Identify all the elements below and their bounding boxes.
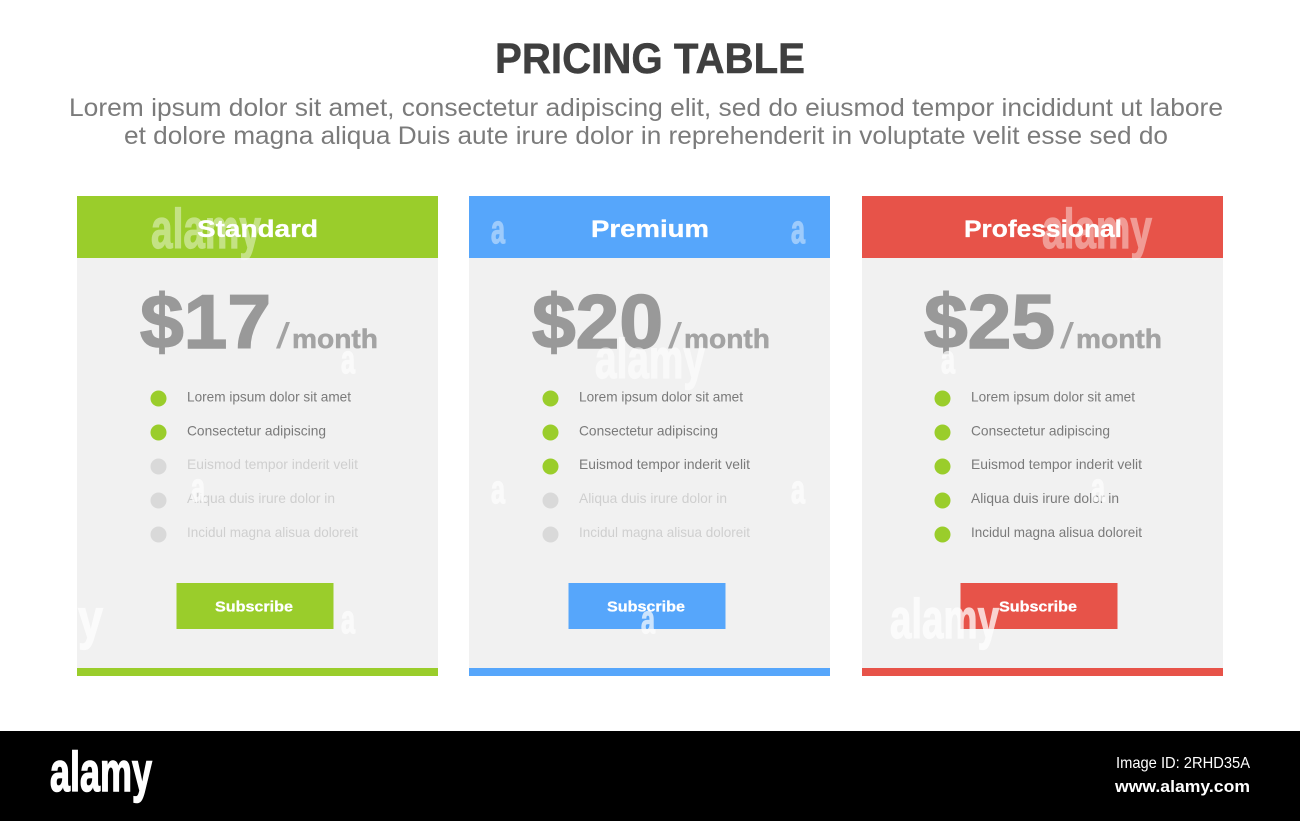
website: www.alamy.com — [1114, 777, 1250, 796]
feature list: Lorem ipsum dolor sit amet — [187, 388, 351, 404]
watermark on header: alamy — [151, 197, 261, 260]
watermarks across the panels: alamy — [595, 327, 705, 390]
watermarks across the panels: a — [641, 598, 655, 642]
subtitle text — [69, 94, 1223, 150]
per month label: / — [668, 315, 682, 356]
watermarks across the panels: a — [191, 466, 205, 510]
price: $20 — [532, 280, 663, 365]
watermarks across the panels: a — [341, 598, 355, 642]
subscribe button: Subscribe — [607, 598, 685, 616]
panel: standard plan — [77, 196, 438, 676]
card background — [862, 196, 1223, 676]
watermarks across the panels: a — [791, 468, 805, 512]
subtitle text: et dolore magna aliqua Duis aute irure dolor in reprehenderit in voluptate velit esse sed do — [124, 122, 1168, 150]
price: $25 — [924, 280, 1055, 365]
feature list: Consectetur adipiscing — [971, 422, 1110, 438]
feature list: Consectetur adipiscing — [579, 422, 718, 438]
per month label — [1060, 315, 1162, 356]
panel: premium plan — [469, 196, 830, 676]
footer logo: alamy — [50, 740, 152, 803]
card background — [469, 196, 830, 676]
watermarks across the panels: y — [78, 587, 103, 650]
bottom accent bar — [469, 668, 830, 676]
per month label — [668, 315, 770, 356]
watermarks across the panels: a — [791, 208, 805, 252]
per month label: month — [292, 324, 378, 354]
header bar — [862, 196, 1223, 258]
subscribe button: Subscribe — [215, 598, 293, 616]
feature list: Consectetur adipiscing — [187, 422, 326, 438]
footer bar — [0, 731, 1300, 821]
plan name: Premium — [591, 216, 709, 243]
bottom accent bar — [77, 668, 438, 676]
feature list: Euismod tempor inderit velit — [971, 456, 1142, 472]
price: $17 — [140, 280, 271, 365]
watermark on header: alamy — [1042, 197, 1152, 260]
feature list: Lorem ipsum dolor sit amet — [579, 388, 743, 404]
watermarks across the panels: a — [941, 338, 955, 382]
card background — [77, 196, 438, 676]
subscribe button: Subscribe — [999, 598, 1077, 616]
watermarks across the panels: a — [491, 468, 505, 512]
watermarks across the panels: a — [491, 208, 505, 252]
per month label: / — [1060, 315, 1074, 356]
image id: Image ID: 2RHD35A — [1116, 755, 1250, 772]
per month label: month — [684, 324, 770, 354]
per month label: month — [1076, 324, 1162, 354]
feature list: Incidul magna alisua doloreit — [187, 524, 358, 540]
feature list: Aliqua duis irure dolor in — [579, 490, 727, 506]
plan name: Professional — [964, 216, 1122, 243]
header bar — [469, 196, 830, 258]
plan name: Standard — [197, 216, 318, 243]
subscribe button — [960, 583, 1118, 629]
header bar — [77, 196, 438, 258]
feature list — [150, 388, 358, 542]
feature list: Aliqua duis irure dolor in — [971, 490, 1119, 506]
subtitle text: Lorem ipsum dolor sit amet, consectetur adipiscing elit, sed do eiusmod tempor incididunt ut labore — [69, 94, 1223, 122]
feature list: Euismod tempor inderit velit — [579, 456, 750, 472]
title: PRICING TABLE — [495, 35, 805, 83]
subscribe button — [568, 583, 726, 629]
feature list — [934, 388, 1142, 542]
watermarks across the panels: a — [341, 338, 355, 382]
per month label: / — [276, 315, 290, 356]
watermarks across the panels: a — [1091, 466, 1105, 510]
watermarks across the panels — [78, 208, 1105, 650]
feature list: Incidul magna alisua doloreit — [971, 524, 1142, 540]
feature list — [542, 388, 750, 542]
feature list: Lorem ipsum dolor sit amet — [971, 388, 1135, 404]
subscribe button — [176, 583, 334, 629]
panel: professional plan — [862, 196, 1223, 676]
feature list: Incidul magna alisua doloreit — [579, 524, 750, 540]
feature list: Aliqua duis irure dolor in — [187, 490, 335, 506]
watermarks across the panels: alamy — [890, 587, 999, 650]
feature list: Euismod tempor inderit velit — [187, 456, 358, 472]
per month label — [276, 315, 378, 356]
bottom accent bar — [862, 668, 1223, 676]
